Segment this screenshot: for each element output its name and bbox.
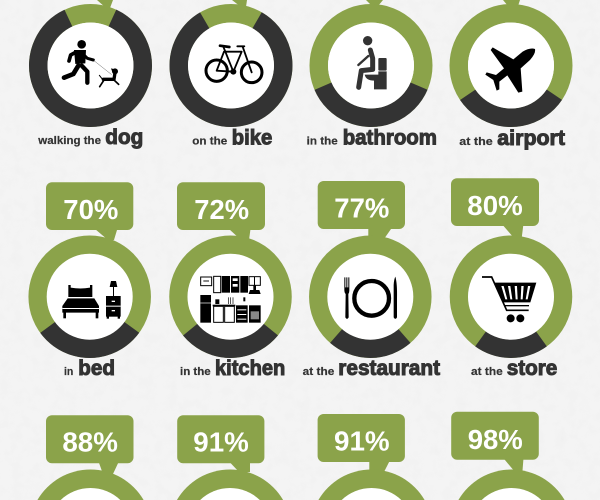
icon: person walking dog — [64, 40, 119, 87]
panel: at the airport — [438, 0, 584, 150]
panel: 88% — [37, 415, 144, 500]
label: on the bike — [192, 126, 272, 150]
label: in the kitchen: kitchen — [215, 357, 285, 380]
donut: 91% first — [177, 470, 283, 500]
panel: 91% first — [177, 415, 283, 500]
panel: at the restaurant — [297, 181, 444, 380]
label: walking the dog: dog — [105, 126, 143, 149]
panel: in the bathroom — [302, 0, 440, 150]
callout: 70% — [46, 182, 133, 240]
panel: on the bike — [160, 0, 302, 150]
label: at the airport: airport — [497, 127, 565, 150]
callout: 72% — [177, 182, 265, 240]
donut: in the bathroom — [302, 0, 440, 134]
callout tail: in the bathroom — [366, 0, 383, 6]
donut: 88% — [37, 470, 144, 500]
label: at the airport: at the — [459, 136, 493, 148]
icon: bicycle — [206, 46, 262, 83]
label: at the store: at the — [471, 366, 503, 378]
label: walking the dog — [37, 126, 143, 149]
label: in the bathroom: bathroom — [343, 126, 437, 150]
label: in the bathroom: in the — [307, 136, 338, 148]
panel: walking the dog — [21, 0, 160, 149]
callout tail: on the bike — [232, 0, 247, 7]
label: walking the dog: walking the — [37, 135, 101, 147]
callout: 77%: 77% — [334, 193, 389, 224]
callout: 88%: 88% — [62, 427, 118, 458]
panel: in bed — [17, 182, 162, 380]
label: on the bike: bike — [232, 126, 272, 150]
callout: 91% second: 91% — [334, 426, 390, 457]
label: at the store: store — [507, 357, 557, 380]
label: in bed: in — [64, 366, 74, 378]
donut: walking the dog — [21, 0, 160, 135]
label: in bed: bed — [78, 357, 115, 380]
donut: at the store — [438, 224, 584, 369]
donut: 91% second — [318, 470, 425, 500]
callout: 70%: 70% — [63, 194, 118, 225]
panel: at the store — [438, 178, 584, 380]
donut: on the bike — [160, 0, 302, 137]
icon: plate with fork and knife — [344, 277, 397, 319]
icon: kitchen — [200, 276, 261, 323]
donut: at the airport — [438, 0, 584, 138]
donut: in bed — [17, 224, 162, 369]
label: in the kitchen — [180, 357, 285, 380]
donut: in the kitchen — [157, 224, 304, 370]
callout: 77% — [318, 181, 405, 240]
panel: 91% second — [318, 414, 425, 500]
icon: person on toilet — [358, 36, 387, 89]
callout: 91% first: 91% — [193, 427, 249, 458]
donut: at the restaurant — [297, 223, 444, 370]
panel: in the kitchen — [157, 182, 304, 380]
label: in the kitchen: in the — [180, 366, 211, 378]
label: on the bike: on the — [192, 136, 227, 148]
callout: 80%: 80% — [467, 190, 523, 221]
callout: 98%: 98% — [468, 424, 523, 455]
panel: 98% — [451, 412, 565, 500]
label: at the airport — [459, 127, 565, 150]
callout tail: at the airport — [503, 0, 520, 6]
icon: bed and nightstand — [62, 281, 121, 319]
donut: 98% — [458, 470, 565, 500]
callout tail: walking the dog — [97, 0, 113, 8]
label: at the restaurant: restaurant — [338, 357, 440, 380]
icon: airplane — [485, 47, 535, 93]
label: at the restaurant: at the — [303, 366, 334, 378]
label: at the store — [471, 357, 557, 380]
icon: shopping cart — [482, 277, 536, 322]
callout: 80% — [451, 178, 539, 238]
callout: 72%: 72% — [194, 194, 249, 225]
